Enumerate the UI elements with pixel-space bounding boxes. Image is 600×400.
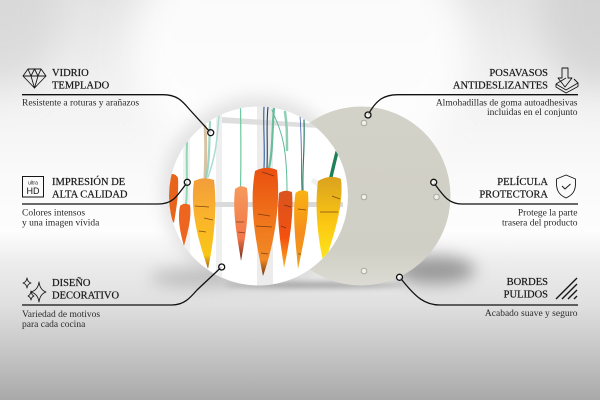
description: Acabado suave y seguro bbox=[485, 309, 578, 319]
carrot 3 bbox=[193, 178, 215, 269]
callout: vidrio templado bbox=[22, 68, 214, 136]
heading: POSAVASOS bbox=[489, 68, 548, 79]
adhesive pad: bottom bbox=[361, 268, 367, 274]
description: Almohadillas de goma autoadhesivas bbox=[436, 98, 578, 108]
heading: TEMPLADO bbox=[52, 80, 110, 92]
adhesive pad: right bbox=[434, 194, 439, 200]
description: para cada cocina bbox=[22, 320, 86, 330]
heading: VIDRIO bbox=[52, 68, 89, 79]
callout: impresión de alta calidad bbox=[22, 176, 190, 228]
window reflection bbox=[183, 106, 343, 286]
adhesive pad: top bbox=[361, 120, 367, 126]
description: trasera del producto bbox=[502, 218, 578, 228]
icon: shield bbox=[556, 175, 576, 198]
connector bbox=[368, 95, 578, 115]
connector bbox=[22, 182, 187, 204]
description: Colores intensos bbox=[22, 208, 85, 218]
carrot 5 bbox=[253, 168, 278, 276]
carrot 6 bbox=[278, 191, 292, 268]
icon: ultra HD: ultra bbox=[28, 180, 38, 186]
description: Protege la parte bbox=[518, 208, 578, 218]
description: Resistente a roturas y arañazos bbox=[22, 98, 139, 108]
marker bbox=[396, 274, 402, 280]
carrot 7 bbox=[294, 190, 308, 269]
heading: PELÍCULA bbox=[497, 176, 548, 188]
callout: bordes pulidos bbox=[396, 274, 578, 319]
connector bbox=[22, 95, 210, 132]
icon: diamond bbox=[23, 69, 46, 88]
heading: DISEÑO bbox=[52, 277, 91, 289]
heading: PULIDOS bbox=[504, 290, 548, 300]
heading: PROTECTORA bbox=[479, 190, 548, 200]
marker bbox=[208, 130, 214, 136]
icon: pad and arrow bbox=[556, 68, 578, 93]
adhesive pad: centre bbox=[361, 194, 367, 200]
description: y una imagen vívida bbox=[22, 218, 100, 228]
carrot 4 bbox=[234, 186, 248, 261]
description: incluidas en el conjunto bbox=[487, 108, 578, 118]
carrot 8 bbox=[317, 177, 342, 265]
icon: ultra HD bbox=[22, 176, 44, 197]
connector bbox=[22, 267, 222, 305]
marker bbox=[365, 112, 371, 118]
carrot leaves bbox=[186, 107, 337, 204]
icon: ultra HD: HD bbox=[26, 186, 40, 196]
callout: posavasos antideslizantes bbox=[365, 68, 578, 118]
icon: polished edge stripes bbox=[556, 278, 577, 299]
marker bbox=[431, 179, 437, 185]
front of coaster: carrot artwork bbox=[168, 106, 350, 288]
heading: IMPRESIÓN DE bbox=[52, 176, 125, 188]
marker bbox=[219, 264, 225, 270]
description: Variedad de motivos bbox=[22, 310, 100, 320]
connector bbox=[400, 278, 578, 305]
heading: ALTA CALIDAD bbox=[52, 190, 128, 200]
connector bbox=[434, 183, 578, 204]
carrot 2 bbox=[179, 204, 190, 246]
marker bbox=[184, 179, 190, 185]
icon: sparkles bbox=[23, 278, 46, 302]
heading: BORDES bbox=[507, 277, 548, 288]
callout: película protectora bbox=[431, 175, 578, 228]
carrot 1 bbox=[168, 174, 178, 223]
heading: ANTIDESLIZANTES bbox=[453, 80, 548, 92]
carrot dark markings bbox=[195, 172, 340, 254]
callout: diseño decorativo bbox=[22, 264, 225, 330]
heading: DECORATIVO bbox=[52, 290, 119, 302]
back of coaster bbox=[272, 106, 450, 286]
ground shadow bbox=[150, 256, 475, 288]
